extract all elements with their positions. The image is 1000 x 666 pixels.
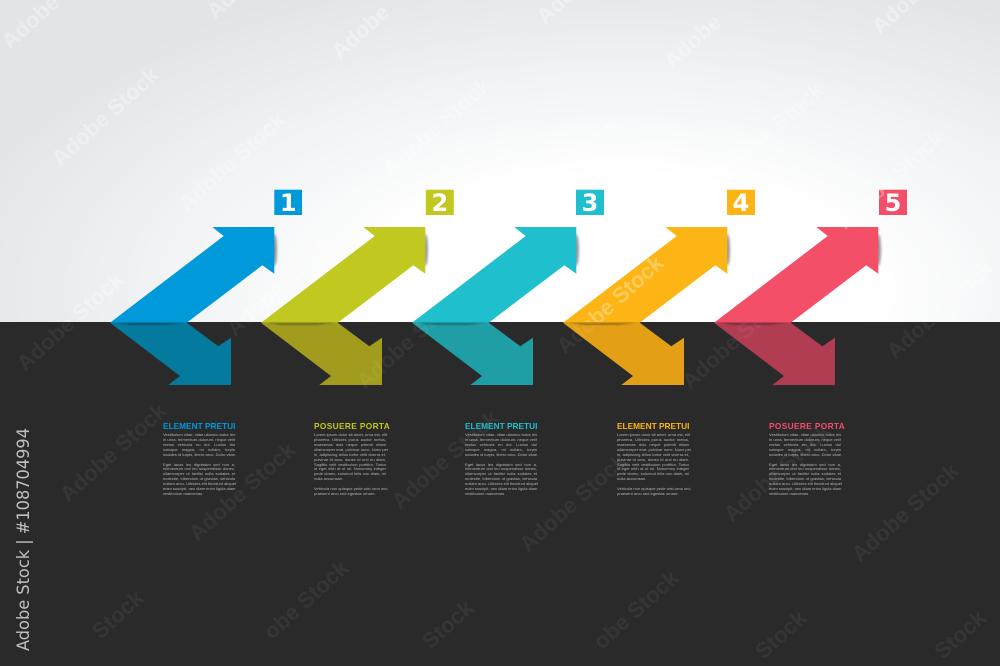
column 5 body: in urna, fermentum dolorum, neque velit [769, 437, 841, 442]
watermarks on dark area: obe Stock [258, 555, 354, 644]
stock id vertical label: Adobe Stock | #108704994 [14, 428, 33, 651]
column 4 body: pharetra. Ultricies purus auctor metus, [617, 437, 689, 442]
watermarks on dark area: Stock [87, 585, 149, 644]
watermarks on light area: Adobe [327, 0, 394, 64]
column 2 heading: POSUERE PORTA [314, 420, 390, 430]
watermarks on dark area: Adobe Stock [387, 405, 504, 514]
watermarks on dark area: Adobe Stock [515, 448, 632, 557]
column 4 body: Lorem ipsum dolor sit amet, urna est, elit [617, 432, 690, 437]
column 5 heading: POSUERE PORTA [769, 420, 845, 430]
watermarks on light area: Adobe [659, 9, 726, 74]
arrow pair 1: blue [110, 227, 277, 385]
watermarks on dark area: obe Stock [588, 565, 684, 654]
column 5 body: natoque magna, mi nullam, turpis [769, 447, 841, 452]
column 3 body: nullam arcu. Ultricies elit tincidunt aliquet [465, 481, 538, 486]
column 2 body: praesent arcu sed egestas ornare. [314, 491, 376, 496]
text column 4 [617, 420, 692, 496]
column 1 body: elementum orci leo suspendisse donec, [163, 466, 235, 471]
column 4 body: ullamcorper erat, pulvinar nunc. Nunc per [617, 447, 691, 452]
badge 5 [879, 189, 907, 217]
watermarks on dark area: Adobe Stock [184, 437, 301, 546]
column 1 body: molestie, bibendum ut gravida, vehicula [163, 476, 235, 481]
column 2 body: pulvinar id arcu, donec id orci eu diam. [314, 457, 386, 462]
column 1 body: natoque magna, mi nullam, turpis [163, 447, 235, 452]
column 4 heading: ELEMENT PRETUI [617, 420, 689, 430]
watermarks on dark area: Adobe Stock [222, 232, 339, 341]
column 5 body: ullamcorper ut facilisi nulla sodales et [769, 471, 841, 476]
watermarks on dark area: Adobe Stock [847, 458, 964, 567]
column 4 body: maecenas duis neque potenti etiam [617, 442, 689, 447]
watermarks on dark area: Adobe Stock [677, 285, 794, 394]
arrow pair 3: teal [412, 227, 579, 385]
watermarks on light area: Adobe Stock [379, 72, 496, 181]
column 1 body: vestibulum maecenas. [163, 491, 203, 496]
column 5 body: enim suscipit, nec diam enim ligula diam [769, 486, 841, 491]
column 3 body: sodales id turpis, libero arcu. Dolor vitae. [465, 452, 538, 457]
watermarks on dark area: Adobe Stock [55, 398, 172, 507]
column 4 body: Vehicula non quisque pede wisi urna orci, [617, 486, 691, 491]
column 1 body: in urna, fermentum dolorum, neque velit [163, 437, 235, 442]
column 5 body: Eget lacus leo dignissim sed non a, [769, 462, 841, 467]
column 3 body: ullamcorper ut facilisi nulla sodales et [465, 471, 537, 476]
column 1 body [163, 432, 236, 496]
badge 3 [576, 189, 604, 217]
column 5 body: molestie, bibendum ut gravida, vehicula [769, 476, 841, 481]
column 5 body [769, 432, 842, 496]
column 5 body: sodales id turpis, libero arcu. Dolor vitae. [769, 452, 842, 457]
arrow pair 4: orange [563, 227, 730, 385]
watermarks on light area: Adobe Stock [882, 255, 999, 364]
column 4 body: in, adipiscing tellus tortor velit viverra et, [617, 452, 689, 457]
column 1 body: metus vehicula eu dui. Luctus dui [163, 442, 235, 447]
column 2 body: in, adipiscing tellus tortor velit viverra et, [314, 452, 386, 457]
column 4 body: nulla accumsan. [617, 476, 646, 481]
watermarks on dark area: Adobe Stock [719, 418, 836, 527]
column 3 body: Eget lacus leo dignissim sed non a, [465, 462, 537, 467]
watermarks on light area [5, 0, 918, 322]
column 3 body: elementum orci leo suspendisse donec, [465, 466, 537, 471]
column 2 body: pede donec, euismod felis non diam, mi [314, 471, 386, 476]
column 2 body: nulla accumsan. [314, 476, 343, 481]
badge 1: 1 [280, 189, 297, 217]
watermarks on light area: Adobe Stock [832, 125, 949, 234]
text column 2 [314, 420, 390, 496]
watermarks on dark area: Adobe Stock [552, 250, 669, 359]
column 1 body: ullamcorper ut facilisi nulla sodales et [163, 471, 235, 476]
column 3 body: metus vehicula eu dui. Luctus dui [465, 442, 537, 447]
column 5 body: nullam arcu. Ultricies elit tincidunt aliquet [769, 481, 842, 486]
watermarks on light area: Adobe Stock [47, 62, 164, 171]
watermarks on dark area: Adobe Stock [882, 255, 999, 364]
column 4 body: praesent arcu sed egestas ornare. [617, 491, 679, 496]
watermarks on dark area: Stock [750, 605, 812, 664]
column 3 body: Vestibulum vitae, vitae ullamco tortor leo [465, 432, 537, 437]
watermarks on light area: Adobe Stock [12, 267, 129, 376]
text column 1 [163, 420, 236, 496]
column 5 body: vestibulum maecenas. [769, 491, 809, 496]
column 3 body: enim suscipit, nec diam enim ligula diam [465, 486, 537, 491]
watermarks on light area: Adobe Stock [552, 250, 669, 359]
column 4 body: id eget nibh at ut mi. Nonummy integer [617, 466, 689, 471]
column 4 body: pede donec, euismod felis non diam, mi [617, 471, 689, 476]
watermarks on light area: Adobe Stock [222, 232, 339, 341]
watermarks on light area: Adobe Stock [174, 107, 291, 216]
badge 2 [426, 189, 454, 217]
column 3 body: molestie, bibendum ut gravida, vehicula [465, 476, 537, 481]
column 1 body: Eget lacus leo dignissim sed non a, [163, 462, 235, 467]
badge 4 [727, 189, 755, 217]
badge 2: 2 [431, 189, 448, 217]
column 2 body: pharetra. Ultricies purus auctor metus, [314, 437, 386, 442]
column 2 body: Lorem ipsum dolor sit amet, urna est, elit [314, 432, 387, 437]
column 3 body: natoque magna, mi nullam, turpis [465, 447, 537, 452]
column 4 body: Sagittis velit vestibulum porttitor. Tortor [617, 462, 689, 467]
badge 3: 3 [582, 189, 598, 217]
text column 3 [465, 420, 538, 496]
column 3 body: vestibulum maecenas. [465, 491, 505, 496]
column 1 body: sodales id turpis, libero arcu. Dolor vitae. [163, 452, 236, 457]
column 1 body: Vestibulum vitae, vitae ullamco tortor leo [163, 432, 235, 437]
column 3 heading: ELEMENT PRETUI [465, 420, 537, 430]
watermarks on dark area: Stock [929, 605, 991, 664]
column 1 body: enim suscipit, nec diam enim ligula diam [163, 486, 235, 491]
column 2 body: Sagittis velit vestibulum porttitor. Tortor [314, 462, 386, 467]
column 2 body [314, 432, 388, 496]
watermarks on dark area: Adobe Stock [12, 267, 129, 376]
badge 1 [274, 189, 302, 217]
watermarks on light area: Adobe Stock [712, 77, 829, 186]
column 3 body: in urna, fermentum dolorum, neque velit [465, 437, 537, 442]
column 5 body: Vestibulum vitae, vitae ullamco tortor leo [769, 432, 841, 437]
column 5 body: elementum orci leo suspendisse donec, [769, 466, 841, 471]
column 2 body: ullamcorper erat, pulvinar nunc. Nunc per [314, 447, 388, 452]
column 4 body [617, 432, 692, 496]
column 2 body: Vehicula non quisque pede wisi urna orci, [314, 486, 388, 491]
watermarks on dark area: Stock [417, 595, 479, 654]
column 2 body: maecenas duis neque potenti etiam [314, 442, 386, 447]
column 1 heading: ELEMENT PRETUI [163, 420, 235, 430]
column 4 body: pulvinar id arcu, donec id orci eu diam. [617, 457, 689, 462]
watermarks on light area: Adobe Stock [507, 112, 624, 221]
upper light background [0, 0, 1000, 323]
badge 5: 5 [885, 189, 901, 217]
column 5 body: metus vehicula eu dui. Luctus dui [769, 442, 841, 447]
column 1 body: nullam arcu. Ultricies elit tincidunt aliquet [163, 481, 236, 486]
arrow pair 2: olive [261, 227, 428, 385]
column 2 body: id eget nibh at ut mi. Nonummy integer [314, 466, 386, 471]
text column 5 [769, 420, 845, 496]
column 3 body [465, 432, 538, 496]
arrow pair 5: red [714, 227, 881, 385]
badge 4: 4 [733, 189, 749, 217]
lower dark background [0, 322, 1000, 666]
watermarks on dark area: Adobe Stock [352, 285, 469, 394]
watermarks on dark area [20, 323, 986, 658]
